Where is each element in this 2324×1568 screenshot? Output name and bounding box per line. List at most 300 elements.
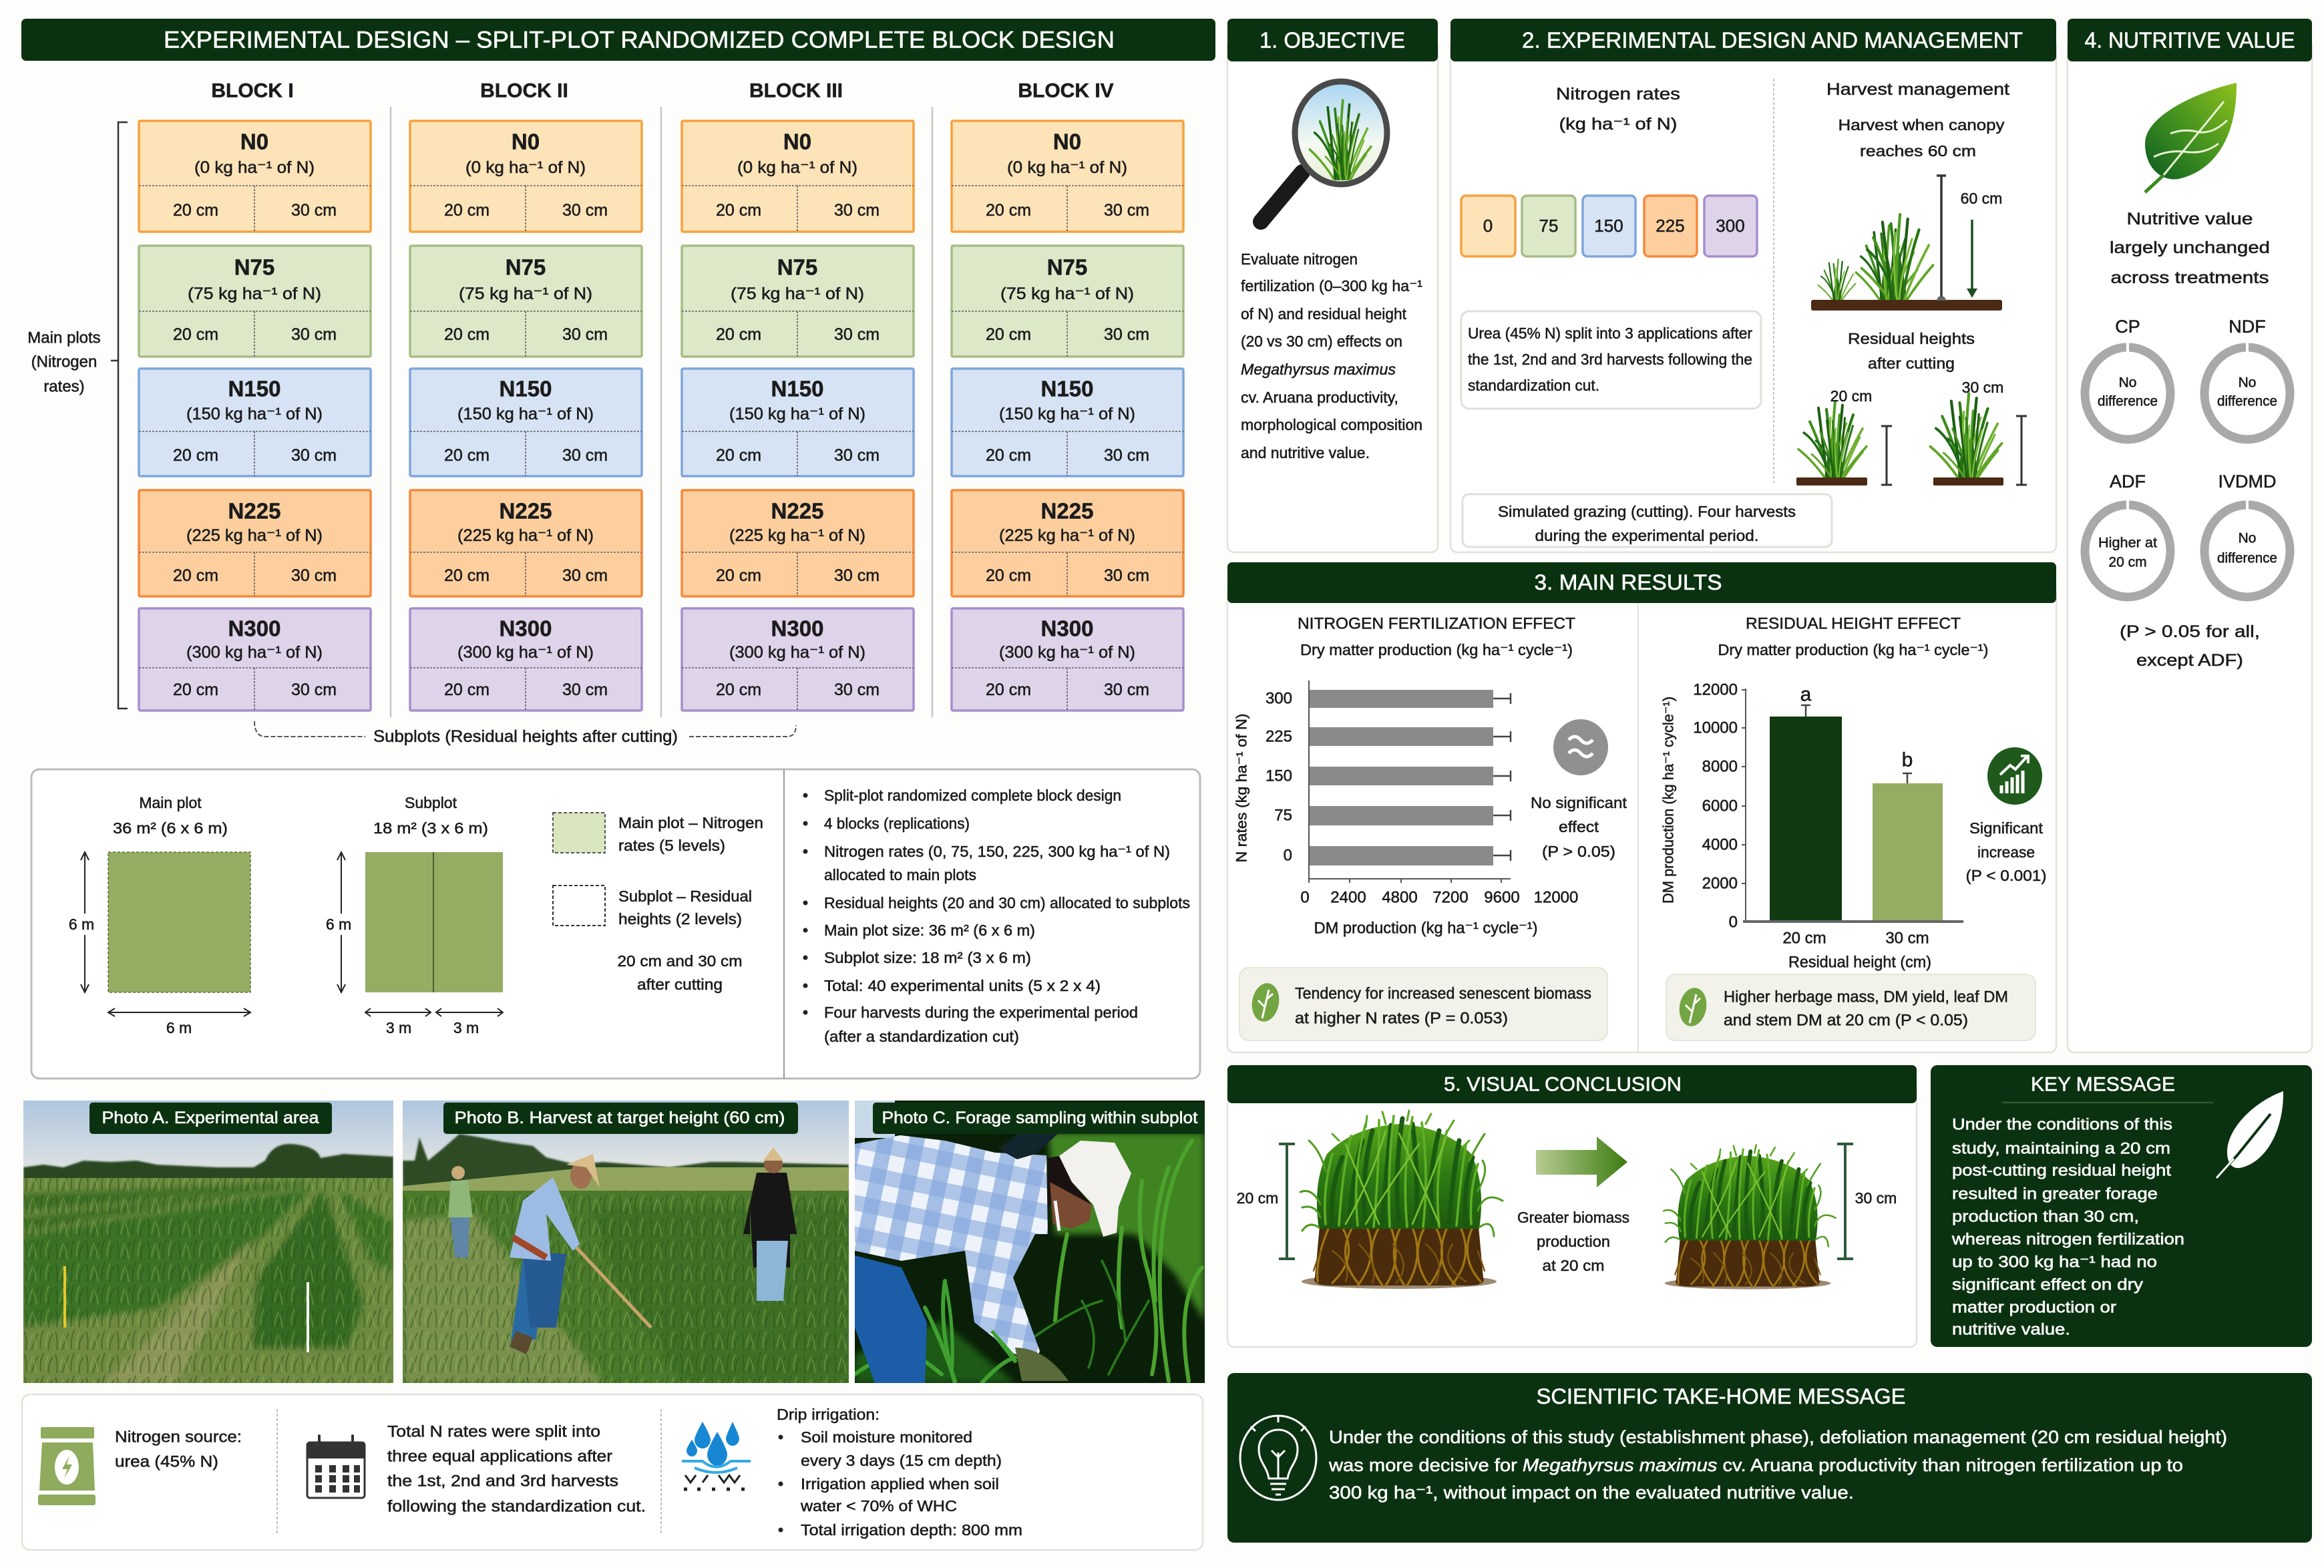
subplot diagram: Subplot (405, 794, 457, 811)
legend: rates (5 levels) (618, 837, 725, 854)
design bullet list: Nitrogen rates (0, 75, 150, 225, 300 kg ha⁻¹ of N) (824, 843, 1170, 860)
bar chart: residual height: 0 (1729, 914, 1738, 931)
nitrogen rate swatches: 225 (1656, 216, 1685, 236)
nitrogen rate swatches: 300 (1716, 216, 1745, 236)
design bullet list: Total: 40 experimental units (5 x 2 x 4) (824, 977, 1101, 994)
block IV N150: 20 cm (986, 446, 1031, 465)
drip irrigation text: water < 70% of WHC (800, 1497, 957, 1515)
heading: section 4 (2068, 19, 2312, 61)
icon: growth chart badge (1987, 747, 2042, 805)
bar chart: residual height: Residual height (cm) (1788, 954, 1931, 971)
p-value note: except ADF) (2136, 651, 2243, 670)
block II N0: 30 cm (562, 201, 608, 220)
harvest management text: Harvest management (1826, 80, 2009, 99)
heading: main results: 3. MAIN RESULTS (1535, 570, 1722, 594)
ring: CP: CP (2115, 317, 2140, 337)
residual plant 20 cm: 20 cm (1830, 387, 1872, 405)
objective text: (20 vs 30 cm) effects on (1241, 333, 1402, 350)
residual plant 20 cm (1796, 387, 1892, 485)
block I N225: 30 cm (291, 566, 337, 585)
block headings: BLOCK I (211, 80, 294, 102)
caption A (89, 1103, 332, 1134)
design bullet list: Main plot size: 36 m² (6 x 6 m) (824, 922, 1035, 939)
icon: green leaf (2145, 83, 2237, 192)
nitrogen source text (115, 1428, 242, 1471)
panel: 5. visual conclusion (1227, 1065, 1917, 1347)
nitrogen rate swatches (1461, 196, 1757, 256)
block IV N225 (952, 490, 1183, 596)
grass clump: 30 cm (1664, 1145, 1836, 1290)
callout: herbage mass: Higher herbage mass, DM yield, leaf DM (1724, 988, 2008, 1006)
panel: key message (1931, 1065, 2312, 1347)
block I N300: N300 (228, 616, 280, 641)
block III N300: 30 cm (834, 680, 880, 699)
block II N0: 20 cm (444, 201, 490, 220)
block III N75 (682, 246, 914, 357)
block II N225: (225 kg ha⁻¹ of N) (457, 526, 594, 545)
simulated grazing callout: Simulated grazing (cutting). Four harvests (1498, 503, 1796, 520)
icon: magnifier with grass (1261, 81, 1387, 222)
block I N75: N75 (234, 255, 274, 279)
ring: CP: No (2119, 375, 2136, 390)
block II N0 (410, 121, 642, 232)
nutritive statement: across treatments (2110, 268, 2269, 287)
block I N150: 30 cm (291, 446, 337, 465)
heading: visual conclusion (1227, 1065, 1917, 1103)
ring: ADF: ADF (2110, 471, 2146, 492)
block I N75: 20 cm (173, 325, 218, 344)
main plots bracket and label (27, 122, 128, 709)
block III N150: 20 cm (716, 446, 761, 465)
drip irrigation text: Soil moisture monitored (801, 1428, 972, 1446)
bar chart: nitrogen rates: 2400 (1330, 888, 1366, 907)
block III N75: 20 cm (716, 325, 761, 344)
ring: IVDMD: difference (2217, 550, 2277, 566)
caption C: Photo C. Forage sampling within subplot (882, 1109, 1198, 1127)
bar chart: residual height: DM production (kg ha⁻¹ cycle⁻¹) (1660, 697, 1676, 904)
drip irrigation text: Total irrigation depth: 800 mm (801, 1521, 1022, 1539)
block II N150 (410, 369, 642, 476)
urea split callout: the 1st, 2nd and 3rd harvests following the (1468, 351, 1752, 368)
key message text: significant effect on dry (1952, 1276, 2143, 1294)
subplots bracket label: Subplots (Residual heights after cutting) (373, 727, 678, 746)
block III N150: (150 kg ha⁻¹ of N) (729, 405, 865, 423)
subplot diagram: 3 m (453, 1019, 479, 1036)
ring: NDF: NDF (2229, 317, 2266, 337)
subplot diagram: 6 m (326, 916, 351, 933)
block I N150: N150 (228, 377, 280, 401)
block I N300: 20 cm (173, 680, 218, 699)
panel: 1. objective (1227, 19, 1438, 552)
design bullet list: Residual heights (20 and 30 cm) allocated to subplots (824, 894, 1190, 912)
subplot diagram (326, 794, 503, 1036)
block I N300: (300 kg ha⁻¹ of N) (186, 643, 323, 662)
block III N0: N0 (783, 130, 811, 154)
significant increase text: Significant (1969, 819, 2044, 837)
key message text: up to 300 kg ha⁻¹ had no (1952, 1253, 2157, 1271)
block I N225: N225 (228, 498, 280, 524)
objective text: cv. Aruana productivity, (1241, 389, 1398, 406)
residual height heading: RESIDUAL HEIGHT EFFECT (1746, 614, 1961, 633)
bar chart: residual height: 20 cm (1782, 930, 1826, 947)
ring: IVDMD: IVDMD (2218, 471, 2276, 492)
icon: white leaf (2216, 1091, 2283, 1178)
N split text: following the standardization cut. (387, 1497, 646, 1516)
nitrogen effect heading: NITROGEN FERTILIZATION EFFECT (1298, 614, 1575, 633)
nitrogen rates heading: Nitrogen rates (1556, 85, 1680, 104)
block III N300 (682, 608, 914, 711)
block IV N225: N225 (1041, 498, 1093, 524)
icon: light bulb (1240, 1416, 1316, 1500)
block III N0: (0 kg ha⁻¹ of N) (737, 158, 857, 177)
block I N150 (139, 369, 371, 476)
N split text: Total N rates were split into (387, 1422, 600, 1441)
block II N300 (410, 608, 642, 711)
nitrogen rates heading (1556, 85, 1680, 134)
bar chart: residual height: 2000 (1702, 875, 1738, 892)
20 cm height marker (1237, 1144, 1295, 1259)
bar chart: nitrogen rates: N rates (kg ha⁻¹ of N) (1233, 713, 1250, 863)
heading: section 2 (1450, 19, 2056, 61)
block IV N75: N75 (1047, 255, 1087, 279)
bar chart: nitrogen rates: 150 (1266, 767, 1292, 785)
legend: 20 cm and 30 cm (617, 952, 743, 970)
photo A: experimental area (23, 1101, 393, 1383)
block II N150: N150 (500, 377, 552, 401)
no significant effect text: No significant (1531, 794, 1627, 811)
main plot diagram: 36 m² (6 x 6 m) (113, 819, 228, 837)
block I N0: (0 kg ha⁻¹ of N) (194, 158, 315, 177)
p-value note (2120, 622, 2260, 670)
block IV N300: N300 (1041, 616, 1093, 641)
block II N75 (410, 246, 642, 357)
block II N150: 20 cm (444, 446, 490, 465)
key message text: nutritive value. (1952, 1321, 2070, 1338)
heading: objective: 1. OBJECTIVE (1260, 28, 1405, 52)
block IV N75: (75 kg ha⁻¹ of N) (1000, 284, 1134, 303)
design bullet list: Four harvests during the experimental period (824, 1004, 1138, 1021)
bar chart: nitrogen rates: 12000 (1534, 888, 1578, 907)
drip irrigation text: Drip irrigation: (777, 1406, 880, 1423)
ring: IVDMD (2204, 471, 2290, 597)
callout: herbage mass (1666, 974, 2036, 1040)
bar chart: residual height: 30 cm (1885, 930, 1929, 947)
title: experimental design header: EXPERIMENTAL DESIGN – SPLIT-PLOT RANDOMIZED COMPLETE BLOCK DESIGN (164, 27, 1115, 53)
heading: visual conclusion: 5. VISUAL CONCLUSION (1444, 1074, 1682, 1095)
block II N300: N300 (500, 616, 552, 641)
block III N225: 20 cm (716, 566, 761, 585)
block I N150: 20 cm (173, 446, 218, 465)
block I N0 (139, 121, 371, 232)
block III N300: 20 cm (716, 680, 761, 699)
bar chart: residual height: b (1902, 749, 1913, 771)
block separators (391, 107, 932, 717)
block IV N75: 20 cm (986, 325, 1031, 344)
callout: senescent biomass: Tendency for increased senescent biomass (1295, 984, 1591, 1003)
bar chart: residual height: 4000 (1702, 836, 1738, 853)
drip irrigation text: every 3 days (15 cm depth) (801, 1452, 1002, 1469)
key message text: post-cutting residual height (1952, 1162, 2171, 1179)
block I N300 (139, 608, 371, 711)
callout: herbage mass: and stem DM at 20 cm (P < 0.05) (1724, 1011, 1968, 1030)
objective text: Evaluate nitrogen (1241, 250, 1358, 268)
design bullet list: 4 blocks (replications) (824, 815, 970, 832)
main plots bracket and label: Main plots (27, 329, 101, 347)
bar chart: nitrogen rates: 225 (1266, 728, 1292, 745)
panel: 3. main results (1227, 562, 2056, 1052)
caption B: Photo B. Harvest at target height (60 cm) (454, 1109, 785, 1127)
panel: key message: KEY MESSAGE (2031, 1074, 2175, 1095)
block IV N225: 30 cm (1104, 566, 1149, 585)
block I N0: 20 cm (173, 201, 218, 220)
block headings (211, 80, 1114, 102)
take-home text: 300 kg ha⁻¹, without impact on the evaluated nutritive value. (1329, 1483, 1854, 1503)
block III N300: (300 kg ha⁻¹ of N) (729, 643, 865, 662)
nitrogen rate swatches: 150 (1594, 216, 1623, 236)
30 cm height marker: 30 cm (1855, 1189, 1897, 1207)
ring: IVDMD: No (2239, 530, 2256, 546)
take-home text: Under the conditions of this study (establishment phase), defoliation management (20 cm residual height) (1329, 1427, 2227, 1447)
block IV N0: 20 cm (986, 201, 1031, 220)
residual heights heading: Residual heights (1848, 330, 1975, 347)
block IV N150 (952, 369, 1183, 476)
block IV N0: N0 (1053, 130, 1081, 154)
harvest management text: Harvest when canopy (1838, 116, 2005, 134)
block headings: BLOCK II (480, 80, 568, 102)
block I N225 (139, 490, 371, 596)
block IV N0: (0 kg ha⁻¹ of N) (1007, 158, 1127, 177)
block III N0: 30 cm (834, 201, 880, 220)
panel: 4. nutritive value (2068, 19, 2312, 1052)
photo C: forage sampling (855, 1101, 1205, 1383)
key message text: matter production or (1952, 1298, 2116, 1317)
residual height heading: Dry matter production (kg ha⁻¹ cycle⁻¹) (1718, 641, 1989, 658)
bar chart: residual height (1660, 681, 1963, 971)
design bullet list: (after a standardization cut) (824, 1028, 1019, 1045)
objective text: Megathyrsus maximus (1241, 361, 1396, 378)
block IV N300: (300 kg ha⁻¹ of N) (999, 643, 1135, 662)
block II N150: (150 kg ha⁻¹ of N) (457, 405, 594, 423)
bar chart: nitrogen rates: DM production (kg ha⁻¹ cycle⁻¹) (1314, 919, 1537, 938)
nitrogen rate swatches: 75 (1539, 216, 1558, 236)
caption B (443, 1103, 798, 1134)
main plots bracket and label: rates) (43, 378, 85, 395)
legend: after cutting (637, 976, 723, 993)
ring: NDF: difference (2217, 394, 2277, 409)
urea split callout: Urea (45% N) split into 3 applications after (1468, 325, 1752, 342)
ring: ADF: 20 cm (2108, 554, 2147, 570)
nutritive statement (2110, 210, 2270, 287)
bar chart: nitrogen rates: 0 (1300, 888, 1310, 907)
ring: NDF (2204, 317, 2290, 439)
block IV N150: N150 (1041, 377, 1093, 401)
greater biomass text: Greater biomass (1517, 1209, 1629, 1226)
legend: Subplot – Residual (618, 888, 752, 905)
no significant effect text: (P > 0.05) (1542, 843, 1615, 860)
greater biomass text (1517, 1209, 1629, 1274)
N split text: three equal applications after (387, 1448, 612, 1465)
key message text: resulted in greater forage (1952, 1185, 2158, 1203)
block IV N0 (952, 121, 1183, 232)
main plot diagram (69, 794, 250, 1036)
30 cm height marker (1837, 1144, 1897, 1259)
block I N0: N0 (240, 130, 268, 154)
subplot diagram: 3 m (386, 1019, 411, 1036)
N split text: the 1st, 2nd and 3rd harvests (387, 1472, 618, 1491)
block IV N225: 20 cm (986, 566, 1031, 585)
bar chart: residual height: 6000 (1702, 797, 1738, 815)
bar chart: residual height: 12000 (1693, 681, 1738, 699)
block II N75: N75 (506, 255, 546, 279)
block III N150: N150 (771, 377, 823, 401)
block IV N150: 30 cm (1104, 446, 1149, 465)
icon: calendar (307, 1436, 365, 1498)
harvest management text (1826, 80, 2009, 160)
subplot diagram: 18 m² (3 x 6 m) (373, 819, 488, 837)
bar chart: residual height: 8000 (1702, 757, 1738, 776)
objective text (1241, 250, 1422, 461)
block II N300: 20 cm (444, 680, 490, 699)
bar chart: nitrogen rates: 0 (1284, 847, 1292, 864)
objective text: and nutritive value. (1241, 444, 1370, 461)
objective text: fertilization (0–300 kg ha⁻¹ (1241, 277, 1422, 295)
design bullet list (803, 787, 1190, 1045)
simulated grazing callout: during the experimental period. (1535, 527, 1759, 544)
block I N75: 30 cm (291, 325, 337, 344)
block II N300: 30 cm (562, 680, 608, 699)
N split text (387, 1422, 646, 1516)
legend: Main plot – Nitrogen (618, 814, 763, 831)
block II N225 (410, 490, 642, 596)
block II N0: (0 kg ha⁻¹ of N) (465, 158, 586, 177)
block III N75: (75 kg ha⁻¹ of N) (731, 284, 864, 303)
block I N300: 30 cm (291, 680, 337, 699)
block IV N75: 30 cm (1104, 325, 1149, 344)
take-home text: was more decisive for Megathyrsus maximus cv. Aruana productivity than nitrogen fertilization up to (1328, 1455, 2183, 1475)
block I N150: (150 kg ha⁻¹ of N) (186, 405, 323, 423)
nutritive statement: Nutritive value (2126, 210, 2253, 228)
key message text (1951, 1115, 2184, 1338)
urea split callout (1461, 311, 1761, 409)
design bullet list: Subplot size: 18 m² (3 x 6 m) (824, 949, 1031, 966)
key message text: whereas nitrogen fertilization (1951, 1230, 2184, 1249)
grass clump: 20 cm (1300, 1111, 1503, 1289)
block II N225: 30 cm (562, 566, 608, 585)
simulated grazing callout (1463, 494, 1832, 547)
icon: irrigation drops (682, 1422, 751, 1489)
nitrogen source text: urea (45% N) (115, 1453, 218, 1471)
callout: senescent biomass (1239, 968, 1607, 1040)
drip irrigation text: Irrigation applied when soil (801, 1475, 999, 1493)
block I N0: 30 cm (291, 201, 337, 220)
block III N75: N75 (777, 255, 817, 279)
nitrogen source text: Nitrogen source: (115, 1428, 242, 1446)
take-home text (1328, 1427, 2227, 1503)
caption C (873, 1103, 1205, 1134)
bar chart: nitrogen rates: 9600 (1484, 888, 1520, 907)
bar chart: residual height: 10000 (1693, 719, 1738, 737)
harvest plant illustration (1811, 176, 2002, 311)
nitrogen effect heading: Dry matter production (kg ha⁻¹ cycle⁻¹) (1300, 641, 1573, 658)
heading: objective (1227, 19, 1438, 61)
urea split callout: standardization cut. (1468, 377, 1599, 394)
design bullet list: allocated to main plots (824, 866, 976, 884)
block I N75 (139, 246, 371, 357)
drip irrigation text (777, 1406, 1022, 1539)
block headings: BLOCK IV (1018, 80, 1114, 102)
20 cm height marker: 20 cm (1237, 1189, 1278, 1207)
panel: plot layout (31, 769, 1200, 1079)
ring: NDF: No (2239, 375, 2256, 390)
block III N75: 30 cm (834, 325, 880, 344)
caption A: Photo A. Experimental area (102, 1109, 319, 1127)
block III N0: 20 cm (716, 201, 761, 220)
main plot diagram: 6 m (69, 916, 94, 933)
worker with hat and tool (510, 1154, 651, 1354)
panel: 2. experimental design and management (1450, 19, 2056, 552)
block I N225: (225 kg ha⁻¹ of N) (186, 526, 323, 545)
bar chart: nitrogen rates: 4800 (1382, 888, 1418, 907)
ring: ADF: Higher at (2098, 536, 2157, 550)
residual heights heading: after cutting (1868, 355, 1955, 372)
worker in black shirt (743, 1147, 797, 1301)
block III N225: N225 (771, 498, 823, 524)
icon: approximately equal (1553, 719, 1608, 775)
arrow: greater biomass (1536, 1137, 1627, 1187)
objective text: of N) and residual height (1241, 305, 1407, 323)
block III N0 (682, 121, 914, 232)
main plot diagram: Main plot (139, 794, 202, 811)
photo B: harvest at target height (403, 1101, 849, 1383)
block II N150: 30 cm (562, 446, 608, 465)
no significant effect text: effect (1559, 818, 1599, 835)
ring: CP: difference (2098, 394, 2158, 409)
heading: main results (1227, 562, 2056, 603)
block III N150 (682, 369, 914, 476)
p-value note: (P > 0.05 for all, (2120, 622, 2260, 641)
block IV N0: 30 cm (1104, 201, 1149, 220)
bar chart: nitrogen rates (1233, 680, 1578, 938)
key message text: study, maintaining a 20 cm (1952, 1139, 2170, 1158)
title: experimental design header (21, 19, 1215, 61)
residual height heading (1718, 614, 1989, 658)
greater biomass text: at 20 cm (1543, 1257, 1604, 1274)
residual plant 30 cm: 30 cm (1962, 379, 2003, 396)
residual heights heading (1848, 330, 1975, 372)
greater biomass text: production (1537, 1233, 1610, 1250)
block III N300: N300 (771, 616, 823, 641)
block headings: BLOCK III (749, 80, 843, 102)
objective text: morphological composition (1241, 416, 1422, 433)
key message text: production than 30 cm, (1952, 1207, 2139, 1226)
worker in green shirt (448, 1166, 473, 1257)
heading: section 2: 2. EXPERIMENTAL DESIGN AND MANAGEMENT (1522, 28, 2023, 52)
nitrogen rates heading: (kg ha⁻¹ of N) (1559, 115, 1678, 134)
significant increase text: (P < 0.001) (1966, 867, 2046, 884)
block III N150: 30 cm (834, 446, 880, 465)
nutritive statement: largely unchanged (2110, 238, 2270, 257)
callout: senescent biomass: at higher N rates (P = 0.053) (1295, 1010, 1508, 1027)
no significant effect text (1531, 794, 1627, 860)
plot grid: blocks I to IV (139, 121, 1183, 711)
bar chart: residual height: a (1800, 684, 1812, 705)
block III N225: 30 cm (834, 566, 880, 585)
design bullet list: Split-plot randomized complete block design (824, 787, 1121, 804)
block IV N225: (225 kg ha⁻¹ of N) (999, 526, 1135, 545)
block IV N150: (150 kg ha⁻¹ of N) (999, 405, 1135, 423)
block II N0: N0 (512, 130, 540, 154)
block II N75: 20 cm (444, 325, 490, 344)
